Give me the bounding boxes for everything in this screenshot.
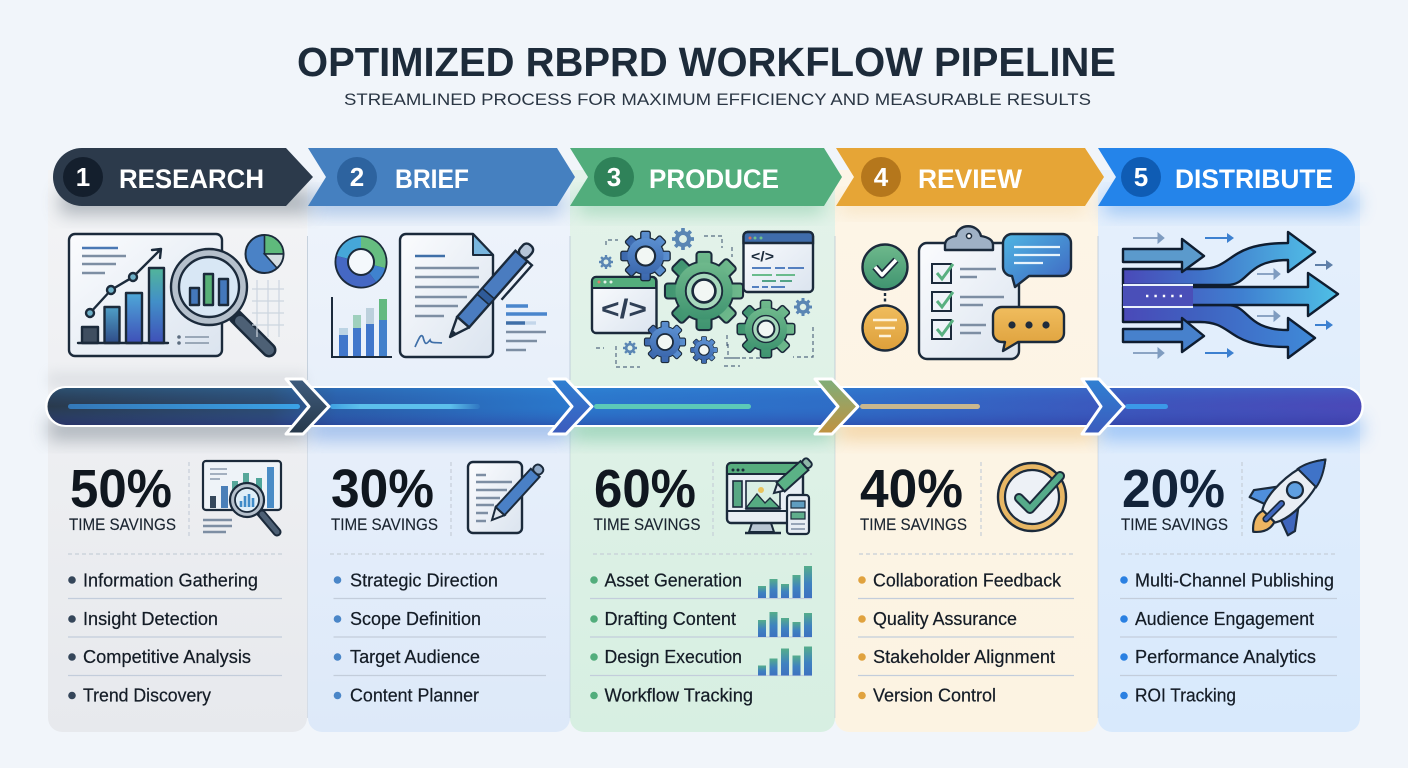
icon: mini chart with magnifier (203, 461, 281, 532)
panel 4 bullet list (858, 554, 1074, 706)
icon: distribute branching arrows (1123, 232, 1338, 358)
step 4 header: review (836, 148, 1104, 206)
header and pipeline soft shadows (48, 190, 1362, 440)
panel 4 bullet list: Version Control (873, 684, 996, 706)
icon: produce gears and code windows: </> (601, 294, 647, 324)
panel 3 stats: TIME SAVINGS (594, 515, 700, 534)
step 3 header: produce: PRODUCE (649, 164, 779, 194)
panel 2 bullet list: Strategic Direction (350, 570, 498, 590)
mini bar chart row 2 (758, 612, 812, 637)
pipeline progress bar (45, 379, 1364, 434)
icon: monitor, pencil and phone (727, 456, 814, 534)
icon: research chart with magnifier (69, 234, 284, 356)
panel 5 bullet list (1120, 554, 1337, 706)
icon: check badge (998, 463, 1066, 531)
step 2 header: brief (308, 148, 575, 206)
panel 1 stats (69, 459, 281, 536)
panel 5 bullet list: Audience Engagement (1135, 608, 1314, 629)
panel 3 stats: 60% (594, 459, 696, 519)
panel 4 stats (860, 459, 1066, 536)
panel 1 bullet list: Trend Discovery (83, 684, 212, 706)
icon: produce gears and code windows: </> (751, 248, 774, 264)
panel 1 bullet list: Information Gathering (83, 570, 258, 590)
panel 2 bullet list (330, 554, 546, 706)
step 2 header: brief: 2 (350, 162, 364, 192)
panel 5 stats: 20% (1122, 459, 1225, 519)
step 1 header: research (53, 148, 313, 206)
icon: document and pen (468, 462, 546, 533)
panel 1 bullet list: Insight Detection (83, 608, 218, 629)
step 5 header: distribute: 5 (1134, 162, 1148, 192)
panel 4 stats: 40% (860, 459, 963, 519)
panel 4 bullet list: Collaboration Feedback (873, 570, 1062, 590)
panel 3 bullet list and mini charts (590, 554, 812, 706)
panel 5 bullet list: Multi-Channel Publishing (1135, 570, 1334, 590)
panel 2 bullet list: Scope Definition (350, 608, 481, 629)
icon: produce gears and code windows (592, 228, 813, 367)
mini bar chart row 3 (758, 646, 812, 676)
step 1 header: research: 1 (76, 162, 90, 192)
panel 4 stats: TIME SAVINGS (860, 515, 967, 534)
panel 3 bullet list and mini charts: Asset Generation (604, 570, 742, 590)
step 2 header: brief: BRIEF (395, 164, 469, 194)
panel 1 bullet list (68, 554, 282, 706)
step 4 header: review: REVIEW (918, 164, 1022, 194)
panel 4 bullet list: Stakeholder Alignment (873, 646, 1055, 667)
subtitle: STREAMLINED PROCESS FOR MAXIMUM EFFICIENCY AND MEASURABLE RESULTS (344, 90, 1091, 109)
panel 2 stats: 30% (331, 459, 434, 519)
panel 2 bullet list: Target Audience (350, 646, 480, 667)
panel 1 bullet list: Competitive Analysis (83, 646, 251, 667)
icon: brief document, charts and pen (332, 234, 547, 357)
panel 3 bullet list and mini charts: Design Execution (604, 646, 742, 667)
panel 1 stats: TIME SAVINGS (69, 515, 176, 534)
panel 3 stats (594, 456, 814, 536)
step 5 header: distribute (1098, 148, 1355, 206)
panel 3 bullet list and mini charts: Workflow Tracking (604, 684, 753, 706)
chevron markers (286, 379, 1124, 434)
panel 3 bullet list and mini charts: Drafting Content (604, 608, 736, 629)
title: OPTIMIZED RBPRD WORKFLOW PIPELINE (297, 39, 1116, 85)
step 3 header: produce (570, 148, 842, 206)
panel 2 bullet list: Content Planner (350, 684, 479, 706)
panel 2 stats (331, 459, 546, 536)
panel 5 stats: TIME SAVINGS (1121, 515, 1228, 534)
column panels (48, 170, 1360, 732)
panel 4 bullet list: Quality Assurance (873, 608, 1017, 629)
step 4 header: review: 4 (874, 162, 889, 192)
step 3 header: produce: 3 (607, 162, 621, 192)
step 5 header: distribute: DISTRIBUTE (1175, 164, 1333, 194)
panel 5 stats (1121, 439, 1346, 552)
panel 5 bullet list: ROI Tracking (1135, 684, 1236, 706)
panel 5 bullet list: Performance Analytics (1135, 646, 1316, 667)
mini bar chart row 1 (758, 566, 812, 598)
icon: rocket (1233, 439, 1346, 552)
icon: review clipboard, checks and speech bubbles (862, 226, 1071, 359)
step 1 header: research: RESEARCH (119, 164, 264, 194)
panel 1 stats: 50% (70, 459, 172, 519)
panel 2 stats: TIME SAVINGS (331, 515, 438, 534)
